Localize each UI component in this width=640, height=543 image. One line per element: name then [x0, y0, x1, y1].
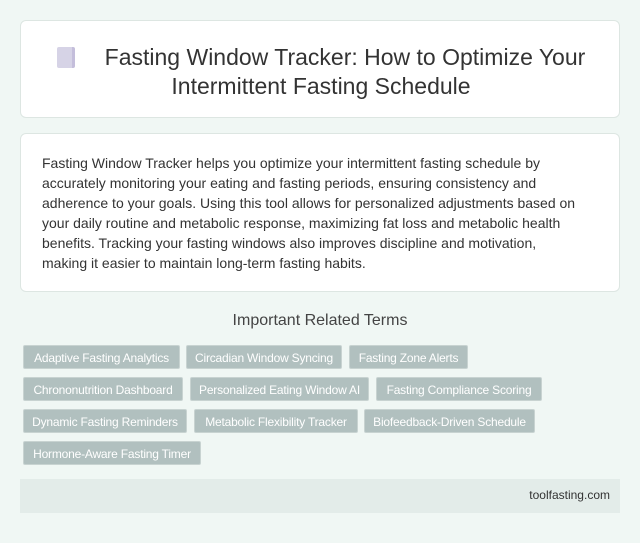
footer text: toolfasting.com [529, 488, 610, 502]
tags: Adaptive Fasting Analytics [34, 351, 169, 365]
tags: Personalized Eating Window AI [199, 383, 360, 397]
tags: Fasting Compliance Scoring [387, 383, 531, 397]
section heading: Important Related Terms [233, 312, 407, 329]
tags: Circadian Window Syncing [195, 351, 333, 365]
description text: Fasting Window Tracker helps you optimize your intermittent fasting schedule by accurately monitoring your eating and fasting periods, ensuring consistency and adherence to your goals. Using this tool allows for personalized adjustments based on your daily routine and metabolic response, maximizing fat loss and metabolic health benefits. Tracking your fasting windows also improves discipline and motivation, making it easier to maintain long-term fasting habits. [42, 155, 575, 271]
description card [20, 133, 620, 292]
tags: Hormone-Aware Fasting Timer [33, 447, 191, 461]
tags: Dynamic Fasting Reminders [32, 415, 178, 429]
title with icon: Fasting Window Tracker: How to Optimize Your Intermittent Fasting Schedule [105, 44, 585, 99]
tags: Biofeedback-Driven Schedule [373, 415, 526, 429]
footer [20, 479, 620, 513]
tags: Fasting Zone Alerts [359, 351, 458, 365]
tags: Metabolic Flexibility Tracker [205, 415, 347, 429]
header card [20, 20, 620, 118]
tags: Chrononutrition Dashboard [33, 383, 173, 397]
